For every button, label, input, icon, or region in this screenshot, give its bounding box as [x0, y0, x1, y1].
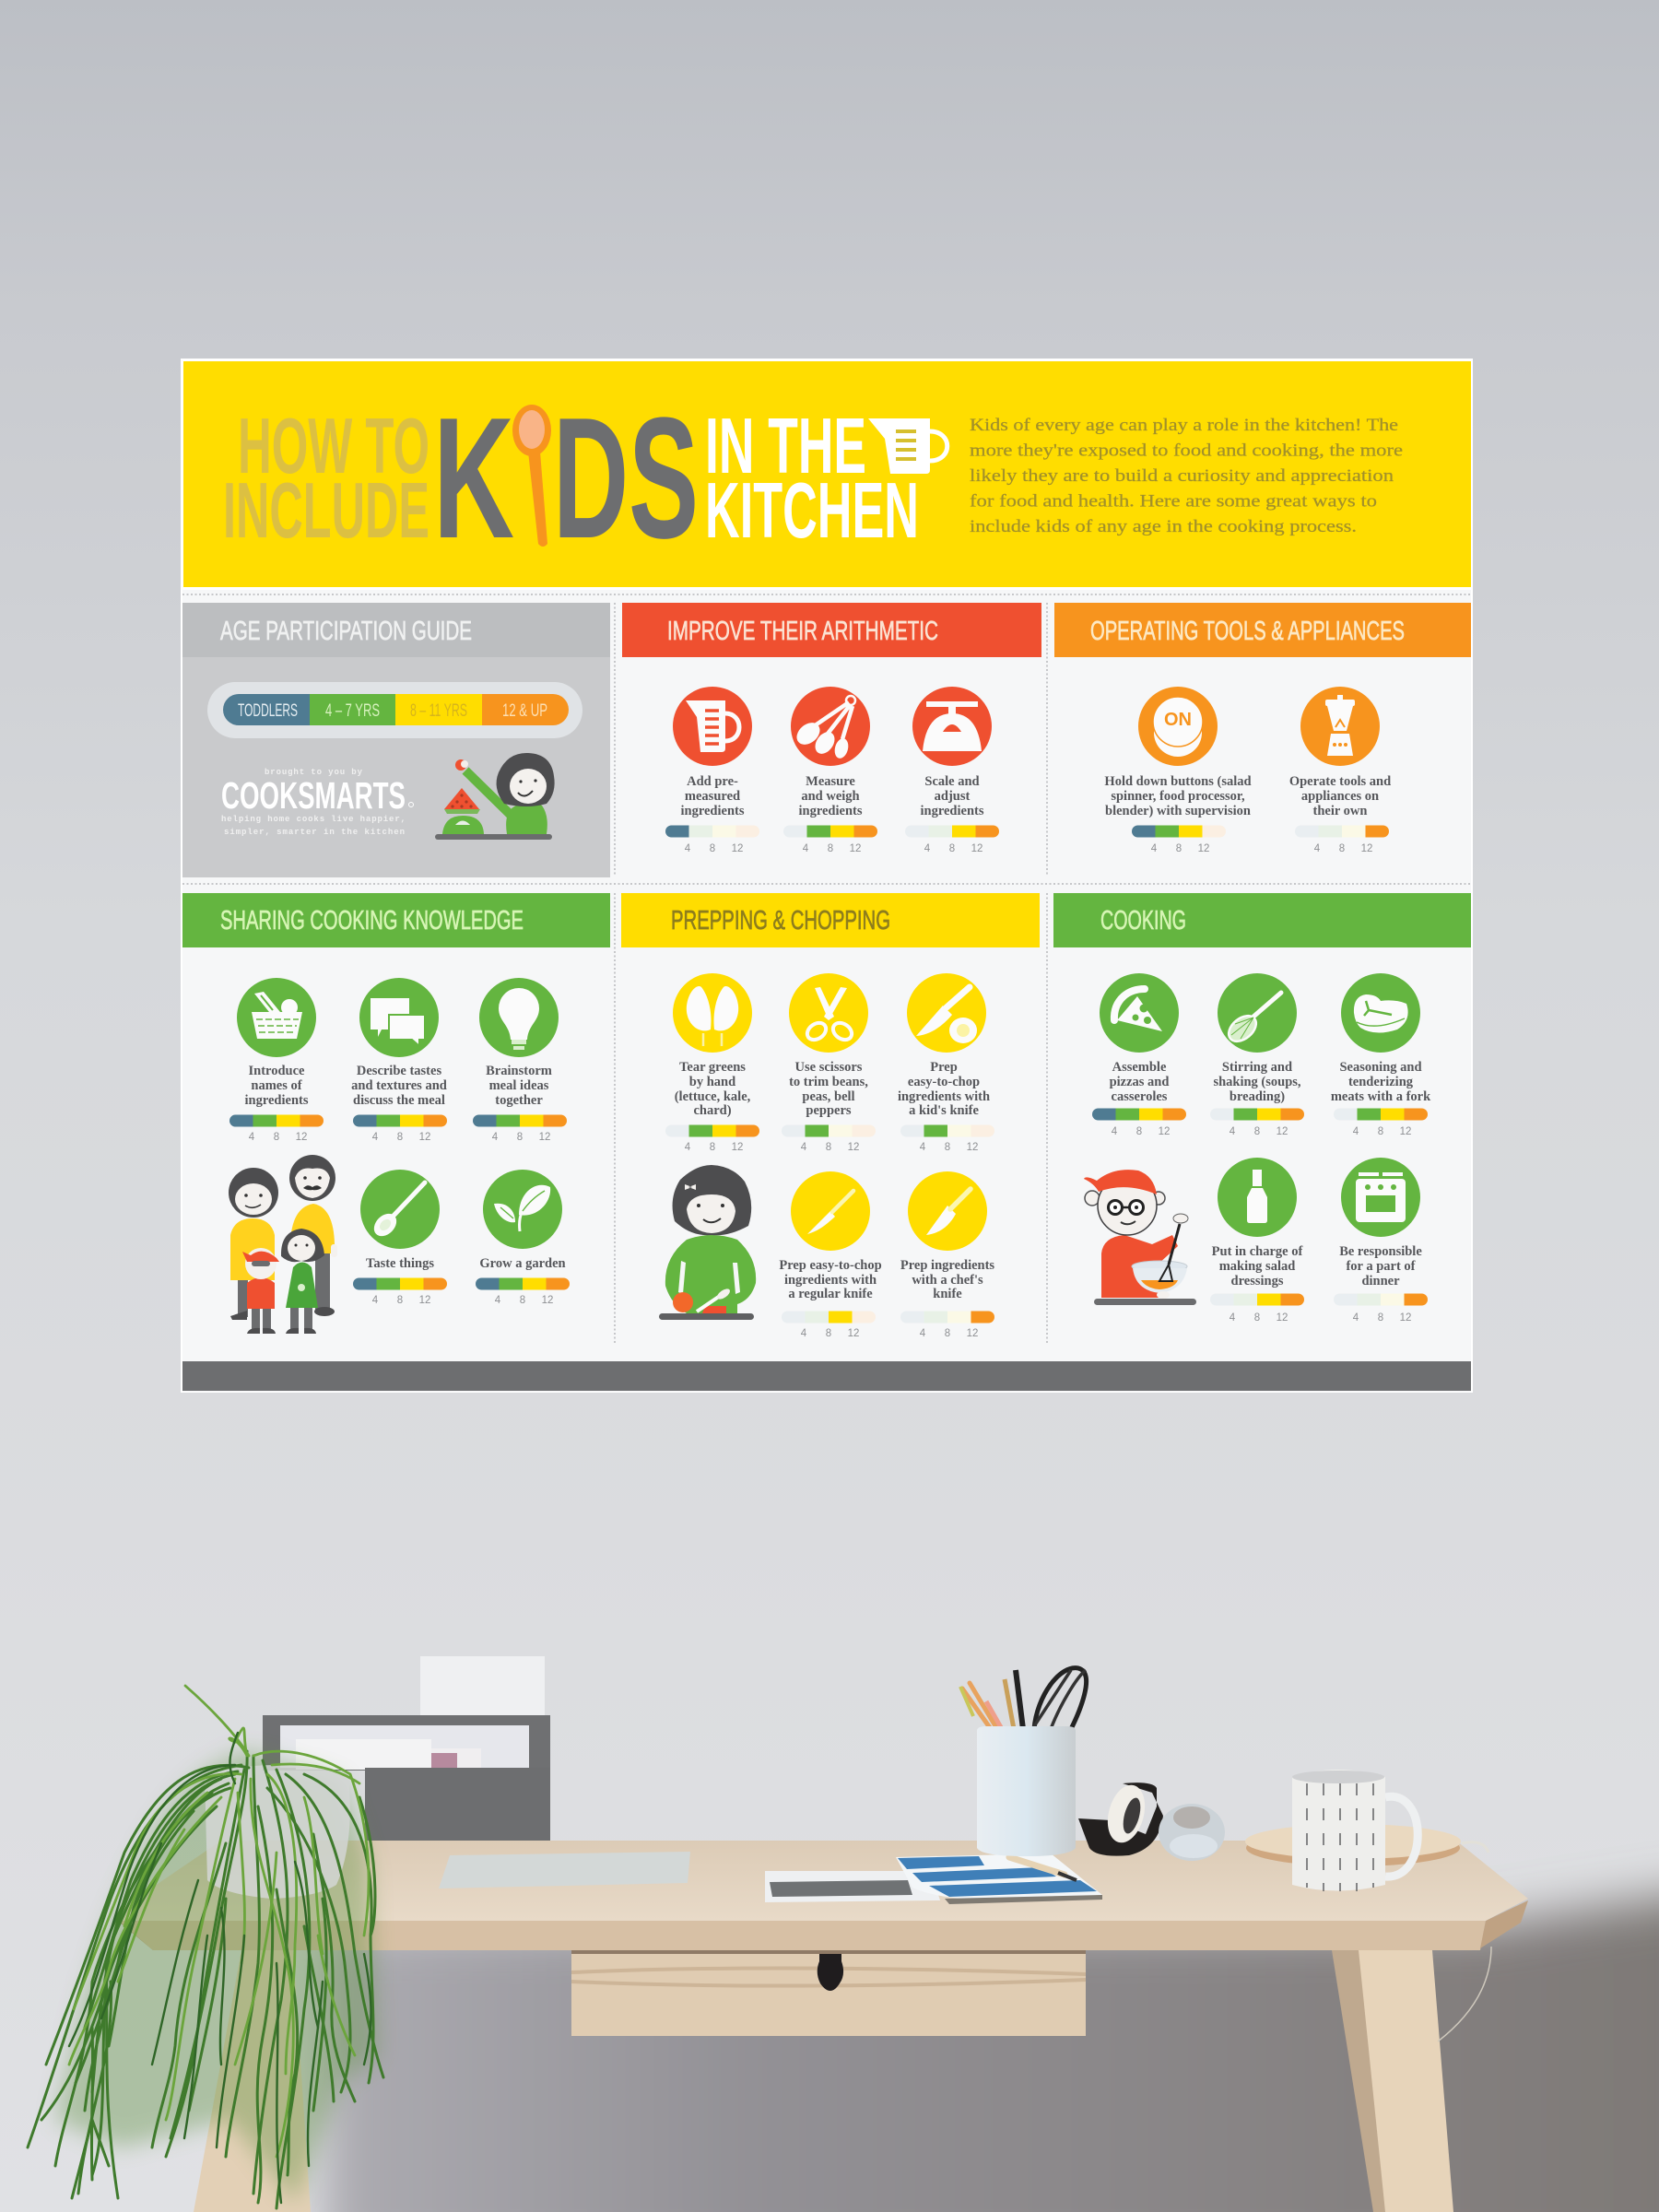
label: operate tools and appliances: appliances on	[1301, 789, 1379, 804]
age bar: 12	[1400, 1312, 1411, 1324]
age bar: 12	[1277, 1126, 1288, 1137]
label: scale and adjust ingredients	[920, 774, 984, 818]
heading: age participation guide: AGE PARTICIPATION GUIDE	[220, 617, 472, 646]
panel: operating tools and appliances	[1054, 603, 1471, 854]
icon: measuring spoons	[791, 687, 870, 766]
age bar: 12	[419, 1132, 430, 1143]
age bar	[1334, 1108, 1428, 1137]
age bar: 4	[685, 1142, 691, 1153]
label: prep with kid's knife: easy-to-chop	[908, 1075, 980, 1089]
panel: improve their arithmetic	[622, 603, 1041, 854]
label: measure and weigh ingredients	[798, 774, 863, 818]
title: in the kitchen: KITCHEN	[705, 467, 919, 555]
label: use scissors: Use scissors	[795, 1060, 863, 1075]
intro paragraph: more they're exposed to food and cooking, the more	[970, 441, 1403, 461]
label: salad dressings: dressings	[1231, 1274, 1284, 1288]
age bar	[665, 826, 759, 854]
label: prep with kid's knife: Prep	[930, 1060, 958, 1075]
label: add pre-measured ingredients	[680, 774, 745, 818]
age bar: 12	[848, 1328, 859, 1339]
age bar: 8	[949, 843, 955, 854]
age bar: 12	[971, 843, 982, 854]
desk leg right	[1332, 1950, 1453, 2212]
age bar: 12	[1277, 1312, 1288, 1324]
plant pot	[205, 1765, 350, 1899]
label: seasoning and tenderizing: Seasoning and	[1339, 1060, 1422, 1075]
logo: cook smarts: brought to you by	[265, 768, 363, 777]
heading: sharing cooking knowledge: SHARING COOKING KNOWLEDGE	[220, 906, 524, 935]
panel: cooking	[1053, 893, 1471, 1324]
age bar: 4	[492, 1132, 499, 1143]
icon: whisk	[1218, 973, 1297, 1053]
wooden plate	[1245, 1824, 1488, 1866]
illustration: boy cooking	[1084, 1170, 1196, 1305]
icon: spoon as letter I	[512, 405, 551, 547]
age bar: 4	[1353, 1312, 1359, 1324]
footer bar	[182, 1361, 1471, 1391]
age bar: 4	[920, 1142, 926, 1153]
age legend pill	[207, 682, 582, 738]
label: prep with kid's knife: ingredients with	[898, 1089, 990, 1104]
cable	[1438, 1947, 1491, 2041]
label: operate tools and appliances	[1289, 774, 1391, 818]
poster	[181, 359, 1473, 1393]
age bar	[900, 1311, 994, 1339]
age bar: 8	[1339, 843, 1345, 854]
age bar: 12	[848, 1142, 859, 1153]
age bar: 8	[1378, 1312, 1383, 1324]
age bar: 4	[1230, 1126, 1236, 1137]
age legend pill: 12 & UP	[502, 701, 547, 721]
logo: cook smarts: helping home cooks live happier,	[221, 815, 406, 824]
label: stirring and shaking: shaking (soups,	[1213, 1075, 1301, 1089]
title: how to include: INCLUDE	[223, 467, 429, 555]
intro paragraph: likely they are to build a curiosity and appreciation	[970, 466, 1394, 486]
label: prep with chef's knife: Prep ingredients	[900, 1258, 994, 1273]
age bar: 4	[249, 1132, 255, 1143]
label: prep with kid's knife: a kid's knife	[909, 1103, 979, 1118]
label: prep with kid's knife	[898, 1060, 990, 1118]
label: prep with chef's knife: with a chef's	[912, 1273, 983, 1288]
label: part of dinner: dinner	[1361, 1274, 1400, 1288]
logo: cook smarts: COOKSMARTS	[221, 774, 406, 817]
age bar	[476, 1277, 570, 1306]
mug	[1292, 1770, 1418, 1891]
intro paragraph: for food and health. Here are some great ways to	[970, 492, 1377, 511]
age bar: 12	[419, 1295, 430, 1306]
label: use scissors: peppers	[806, 1103, 852, 1118]
icon: on button: ON	[1164, 710, 1192, 730]
age bar: 4	[803, 843, 809, 854]
age bar	[900, 1124, 994, 1153]
title: how to include: HOW TO	[238, 403, 429, 490]
label: prep with chef's knife: knife	[933, 1287, 962, 1301]
plant	[28, 1686, 383, 2208]
age bar: 4	[1112, 1126, 1118, 1137]
label: stirring and shaking: breading)	[1230, 1089, 1285, 1104]
label: add pre-measured ingredients: ingredients	[680, 804, 745, 818]
label: assemble pizzas: casseroles	[1112, 1089, 1168, 1104]
title: kids: DS	[553, 382, 699, 574]
label: brainstorm meal ideas: together	[495, 1093, 543, 1108]
age bar	[353, 1277, 447, 1306]
age bar: 4	[924, 843, 931, 854]
icon: bottle	[1218, 1158, 1297, 1237]
label: salad dressings: Put in charge of	[1212, 1244, 1303, 1259]
intro paragraph: Kids of every age can play a role in the kitchen! The	[970, 416, 1398, 435]
age bar: 8	[945, 1328, 950, 1339]
icon: measuring cup	[673, 687, 752, 766]
label: seasoning and tenderizing: tenderizing	[1348, 1075, 1414, 1089]
label: brainstorm meal ideas: Brainstorm	[486, 1064, 552, 1078]
label: stirring and shaking: Stirring and	[1222, 1060, 1292, 1075]
heading: operating tools and appliances	[1054, 603, 1471, 657]
label: prep with regular knife: ingredients with	[784, 1273, 877, 1288]
age bar	[229, 1115, 324, 1143]
label: tear greens: (lettuce, kale,	[675, 1089, 751, 1104]
title: kids: K	[433, 382, 514, 574]
label: introduce names of ingredients: names of	[251, 1078, 302, 1093]
label: prep with regular knife: Prep easy-to-chop	[779, 1258, 882, 1273]
icon: regular knife	[791, 1171, 870, 1251]
icon: greens	[673, 973, 752, 1053]
age bar: 12	[1159, 1126, 1170, 1137]
age bar: 8	[1254, 1312, 1260, 1324]
label: describe tastes	[351, 1064, 447, 1108]
illustration: girl chopping	[659, 1165, 756, 1320]
icon: basket	[237, 978, 316, 1057]
label: scale and adjust ingredients: ingredients	[920, 804, 984, 818]
desk organizer	[263, 1656, 550, 1854]
age bar: 12	[539, 1132, 550, 1143]
title: in the kitchen	[705, 403, 919, 555]
age bar: 8	[397, 1132, 403, 1143]
age bar	[905, 826, 999, 854]
title: kids	[433, 382, 699, 574]
age bar: 12	[850, 843, 861, 854]
icon: blender	[1300, 687, 1380, 766]
label: taste things: Taste things	[366, 1256, 434, 1271]
label: part of dinner	[1339, 1244, 1422, 1288]
age bar: 4	[372, 1295, 379, 1306]
age bar: 12	[967, 1142, 978, 1153]
label: prep with regular knife: a regular knife	[788, 1287, 873, 1301]
age bar: 8	[826, 1328, 831, 1339]
label: tear greens: Tear greens	[679, 1060, 746, 1075]
label: hold down buttons	[1104, 774, 1252, 818]
label: tear greens: by hand	[689, 1075, 735, 1089]
age bar	[1210, 1294, 1304, 1324]
age bar: 12	[542, 1295, 553, 1306]
label: operate tools and appliances: their own	[1313, 804, 1367, 818]
icon: steak	[1341, 973, 1420, 1053]
label: introduce names of ingredients: Introduce	[249, 1064, 305, 1078]
age bar	[1132, 826, 1226, 854]
age bar	[1295, 826, 1389, 854]
label: use scissors: to trim beans,	[789, 1075, 868, 1089]
label: describe tastes: and textures and	[351, 1078, 447, 1093]
label: introduce names of ingredients: ingredients	[244, 1093, 309, 1108]
icon: on button	[1138, 687, 1218, 766]
age bar: 12	[1361, 843, 1372, 854]
age bar: 4	[920, 1328, 926, 1339]
heading: sharing cooking knowledge	[182, 893, 610, 947]
heading: prepping and chopping: PREPPING & CHOPPING	[671, 906, 890, 935]
age bar: 8	[828, 843, 833, 854]
title: how to include	[223, 403, 429, 555]
label: stirring and shaking	[1213, 1060, 1301, 1104]
label: use scissors	[789, 1060, 868, 1118]
label: salad dressings	[1212, 1244, 1303, 1288]
label: measure and weigh ingredients: and weigh	[801, 789, 860, 804]
label: part of dinner: Be responsible	[1339, 1244, 1422, 1259]
age bar: 8	[1254, 1126, 1260, 1137]
panel: age participation guide	[182, 603, 610, 877]
icon: spoon	[360, 1170, 440, 1249]
age legend pill: TODDLERS	[238, 701, 298, 721]
label: brainstorm meal ideas	[486, 1064, 552, 1108]
table top	[119, 1841, 1528, 1950]
label: use scissors: peas, bell	[802, 1089, 855, 1104]
age bar	[783, 826, 877, 854]
heading: improve their arithmetic	[622, 603, 1041, 657]
label: describe tastes: Describe tastes	[357, 1064, 441, 1078]
pen cup	[960, 1668, 1087, 1856]
icon: sprout	[483, 1170, 562, 1249]
desk drawer	[571, 1950, 1086, 2036]
age bar: 8	[274, 1132, 279, 1143]
age bar: 12	[1400, 1126, 1411, 1137]
label: describe tastes: discuss the meal	[353, 1093, 445, 1108]
title: in the kitchen: IN THE	[705, 403, 866, 490]
age bar: 12	[732, 1142, 743, 1153]
shadow below desk	[323, 1889, 1659, 2212]
age legend pill: 4 – 7 YRS	[325, 701, 380, 721]
label: introduce names of ingredients	[244, 1064, 309, 1108]
age bar	[782, 1124, 876, 1153]
heading: improve their arithmetic: IMPROVE THEIR ARITHMETIC	[667, 617, 938, 646]
label: hold down buttons: Hold down buttons (salad	[1104, 774, 1252, 789]
age bar	[1334, 1294, 1428, 1324]
age bar: 8	[710, 1142, 715, 1153]
age bar: 8	[1136, 1126, 1142, 1137]
heading: prepping and chopping	[621, 893, 1040, 947]
age legend pill: 8 – 11 YRS	[410, 701, 467, 721]
label: grow a garden: Grow a garden	[479, 1256, 566, 1271]
age bar: 8	[520, 1295, 525, 1306]
label: add pre-measured ingredients: Add pre-	[687, 774, 738, 789]
age bar: 8	[710, 843, 715, 854]
label: add pre-measured ingredients: measured	[685, 789, 740, 804]
label: hold down buttons: blender) with supervision	[1105, 804, 1251, 818]
panel: sharing cooking knowledge	[182, 893, 610, 1334]
desk leg left	[194, 1950, 311, 2212]
label: assemble pizzas: pizzas and	[1110, 1075, 1169, 1089]
icon: chef's knife	[908, 1171, 987, 1251]
icon: oven	[1341, 1158, 1420, 1237]
label: seasoning and tenderizing: meats with a fork	[1331, 1089, 1431, 1104]
label: seasoning and tenderizing	[1331, 1060, 1431, 1104]
age bar: 8	[1176, 843, 1182, 854]
desk	[119, 1841, 1528, 2212]
age bar: 8	[945, 1142, 950, 1153]
tape dispenser	[1078, 1781, 1163, 1856]
age bar: 4	[1353, 1126, 1359, 1137]
label: tear greens	[675, 1060, 751, 1118]
age bar	[353, 1115, 447, 1143]
label: prep with chef's knife	[900, 1258, 994, 1301]
heading: cooking	[1053, 893, 1471, 947]
age bar: 4	[495, 1295, 501, 1306]
age bar: 12	[732, 843, 743, 854]
age bar: 8	[826, 1142, 831, 1153]
age bar: 8	[517, 1132, 523, 1143]
age bar	[1092, 1108, 1186, 1137]
age bar: 8	[1378, 1126, 1383, 1137]
age bar: 12	[967, 1328, 978, 1339]
age bar: 12	[1198, 843, 1209, 854]
label: brainstorm meal ideas: meal ideas	[489, 1078, 549, 1093]
label: assemble pizzas: Assemble	[1112, 1060, 1167, 1075]
glass paperweight	[1159, 1804, 1225, 1861]
label: part of dinner: for a part of	[1346, 1259, 1416, 1274]
panel: prepping and chopping	[621, 893, 1040, 1339]
icon: light bulb	[479, 978, 559, 1057]
label: hold down buttons: spinner, food processor,	[1111, 789, 1245, 804]
age bar	[782, 1311, 876, 1339]
label: prep with regular knife	[779, 1258, 882, 1301]
age bar	[473, 1115, 567, 1143]
age bar: 4	[1314, 843, 1321, 854]
age bar: 4	[685, 843, 691, 854]
heading: operating tools and appliances: OPERATING TOOLS & APPLIANCES	[1090, 617, 1405, 646]
illustration: girl with scale	[435, 753, 555, 840]
label: operate tools and appliances: Operate tools and	[1289, 774, 1391, 789]
age bar: 4	[372, 1132, 379, 1143]
age bar: 4	[1230, 1312, 1236, 1324]
icon: kitchen scale	[912, 687, 992, 766]
label: tear greens: chard)	[693, 1103, 732, 1118]
icon: measuring cup	[868, 418, 947, 474]
age bar	[665, 1124, 759, 1153]
label: salad dressings: making salad	[1219, 1259, 1295, 1274]
icon: pizza slice	[1100, 973, 1179, 1053]
heading: cooking: COOKING	[1100, 906, 1186, 935]
age bar: 4	[801, 1328, 807, 1339]
heading: age participation guide	[182, 603, 610, 657]
intro paragraph: include kids of any age in the cooking process.	[970, 517, 1357, 536]
paper on desk	[439, 1852, 690, 1888]
label: scale and adjust ingredients: Scale and	[924, 774, 980, 789]
label: measure and weigh ingredients: ingredients	[798, 804, 863, 818]
icon: knife and lemon	[907, 973, 986, 1053]
intro paragraph	[970, 416, 1403, 536]
illustration: family	[229, 1155, 337, 1334]
icon: speech bubbles	[359, 978, 439, 1057]
label: scale and adjust ingredients: adjust	[935, 789, 971, 804]
age bar: 12	[296, 1132, 307, 1143]
title banner	[183, 361, 1471, 587]
age bar	[1210, 1108, 1304, 1137]
logo: cook smarts	[221, 768, 413, 837]
icon: scissors	[789, 973, 868, 1053]
label: measure and weigh ingredients: Measure	[806, 774, 855, 789]
age bar: 8	[397, 1295, 403, 1306]
age bar: 4	[801, 1142, 807, 1153]
label: assemble pizzas	[1110, 1060, 1169, 1104]
notebook and prints	[765, 1853, 1102, 1904]
age bar: 4	[1151, 843, 1158, 854]
logo: cook smarts: simpler, smarter in the kitchen	[224, 828, 405, 837]
